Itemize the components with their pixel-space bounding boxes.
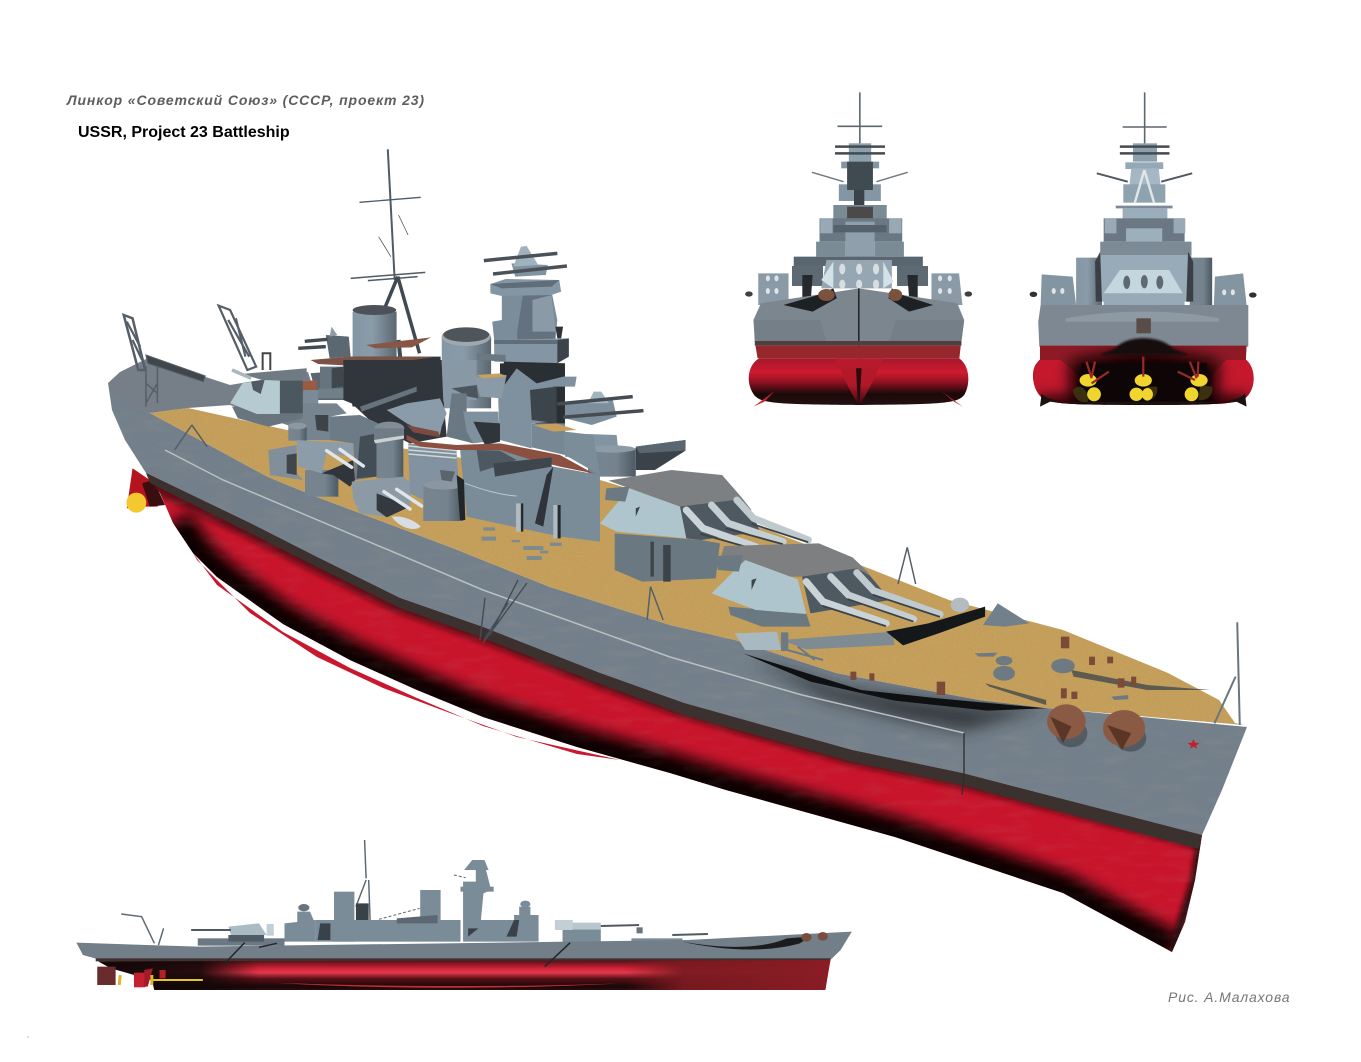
armour step: [962, 733, 964, 795]
main perspective view of the battleship: [100, 149, 1255, 960]
side rudders and props: [97, 967, 116, 985]
lower funnel: [442, 360, 477, 402]
red stern hull: [1033, 346, 1254, 405]
forward main turret B: [600, 470, 808, 582]
superstructure: [198, 860, 682, 946]
aft AA director tub: [423, 485, 463, 521]
fore tower lower: [498, 368, 577, 448]
deck gear: [975, 603, 1210, 705]
upper superstructure: mast, funnels and fore tower: [298, 149, 686, 477]
after funnel: [353, 312, 397, 362]
stern cranes and gear: [124, 306, 270, 450]
bow mast: [837, 92, 882, 143]
bow casemates: [745, 273, 972, 305]
stern view: [1030, 92, 1257, 415]
stern tower: [1076, 143, 1212, 307]
bow tower: [792, 143, 928, 298]
dark bridge mass: [345, 357, 441, 407]
artist credit: Рис. А.Малахова: [1168, 989, 1290, 1005]
boot stripe and red: [755, 341, 961, 346]
hull ladder: [480, 580, 527, 643]
forecastle fittings: [647, 547, 1240, 752]
forward main turret A: [712, 543, 940, 627]
tower side blocks: [475, 375, 507, 398]
main casemate wall: [460, 448, 600, 542]
stern hull: [1038, 305, 1248, 347]
keel strip: [193, 553, 620, 760]
anchors and flare shadow: [783, 288, 933, 312]
title: Russian caption: Линкор «Советский Союз» (СССР, проект 23): [66, 92, 425, 108]
aft block cluster: [300, 403, 347, 440]
small tripods: [647, 547, 916, 620]
light pillars: [516, 503, 558, 538]
ship's boat: [392, 516, 421, 529]
forward AA mount: [557, 392, 686, 477]
red underwater hull: [130, 460, 1220, 960]
small deckhouse: [387, 398, 447, 435]
boat and crane amidships: [735, 632, 781, 650]
aft main turret: [230, 368, 307, 427]
blurred shadow under the counter: [1038, 352, 1250, 415]
hull belt line: [165, 450, 964, 733]
fore funnel: [442, 337, 491, 408]
tall round mount: [377, 438, 403, 478]
shadow under bow flare: [743, 653, 1046, 732]
hawse anchors: [1047, 704, 1146, 752]
twin gun barrels: [327, 449, 422, 509]
stern casemates: [1030, 273, 1257, 305]
aft upper blocks: [302, 380, 317, 392]
three yellow propellers: [1073, 357, 1212, 402]
stern mast: [1123, 92, 1167, 143]
ladder: [360, 387, 417, 412]
breakwater: [781, 632, 895, 649]
rudder and stern propeller: [126, 468, 165, 513]
midship superstructure: [268, 360, 600, 560]
side profile view: [76, 840, 852, 990]
bow hull upper: [753, 288, 964, 342]
small mark bottom left: [27, 1036, 29, 1038]
side grey hull: [76, 932, 852, 960]
stepped wall with white stripes: [408, 450, 460, 500]
deck hatches: [482, 527, 562, 560]
mast: [351, 149, 425, 353]
dark mass behind: [343, 360, 447, 443]
stern deck: [108, 358, 330, 440]
boot topping stripe: [146, 473, 1202, 849]
after AA director mount: [298, 327, 353, 400]
grey hull side: [100, 375, 1255, 845]
forward twin casemate: [352, 477, 412, 517]
jack staff: [1215, 622, 1240, 725]
hull star: [1188, 739, 1199, 749]
fore tower upper: [477, 246, 569, 430]
red-brown coaming: [407, 435, 593, 473]
side boot stripe and red hull: [96, 958, 830, 961]
platforms: [366, 337, 431, 348]
title: English caption: USSR, Project 23 Battleship: [78, 124, 290, 141]
teak deck: [150, 408, 1244, 725]
mast and cranes: [121, 840, 370, 945]
bow view: [745, 92, 972, 407]
